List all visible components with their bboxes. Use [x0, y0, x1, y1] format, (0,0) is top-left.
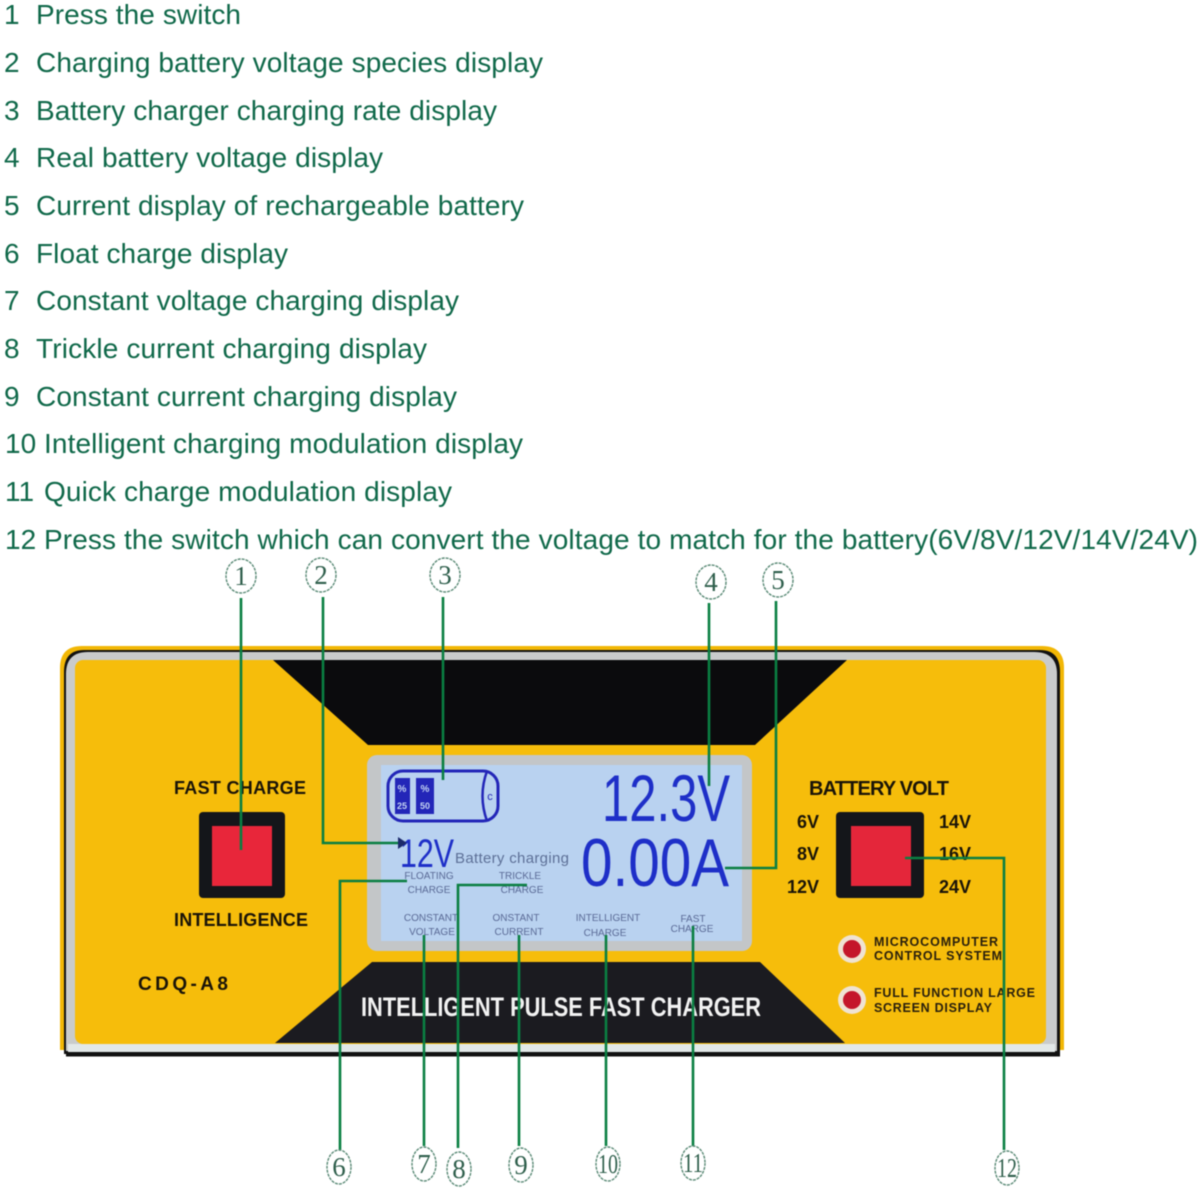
mode labels: CHARGE [584, 928, 627, 939]
mode labels: FLOATING [404, 871, 454, 882]
legend list: 4 [4, 142, 20, 173]
callout numbers: 8 [452, 1154, 466, 1184]
callout numbers: 10 [598, 1149, 618, 1179]
left switch: FAST CHARGE [174, 778, 306, 798]
right switch and voltage labels: 8V [797, 844, 819, 864]
legend list: Battery charger charging rate display [36, 95, 497, 126]
legend list: 6 [4, 238, 20, 269]
callout numbers: 12 [997, 1153, 1017, 1183]
legend list: Trickle current charging display [36, 333, 427, 364]
legend list: 2 [4, 47, 20, 78]
legend list: Quick charge modulation display [44, 476, 452, 507]
callout numbers: 3 [438, 560, 452, 590]
legend list: Real battery voltage display [36, 142, 383, 173]
mode labels: CHARGE [408, 885, 451, 896]
legend list: 11 [5, 476, 34, 507]
right switch and voltage labels: BATTERY VOLT [809, 778, 949, 800]
right switch and voltage labels [787, 778, 971, 898]
legend list: 8 [4, 333, 20, 364]
mode labels: TRICKLE [499, 871, 541, 882]
legend list: 9 [4, 381, 20, 412]
charger front panel [60, 646, 1064, 1056]
callout numbers: 4 [704, 567, 718, 597]
battery icon: c [487, 791, 493, 803]
mode labels: CHARGE [501, 885, 544, 896]
left switch: INTELLIGENCE [174, 910, 308, 930]
indicator lights: FULL FUNCTION LARGE [874, 986, 1035, 1000]
battery icon: 25 [397, 801, 407, 811]
mode labels: ONSTANT [492, 913, 540, 924]
right switch and voltage labels: 12V [787, 877, 819, 897]
callout numbers: 9 [514, 1150, 528, 1180]
mode labels: VOLTAGE [409, 927, 455, 938]
legend list: 3 [4, 95, 20, 126]
status text: Battery charging [455, 850, 569, 867]
callout numbers: 5 [771, 565, 785, 595]
mode labels: INTELLIGENT [576, 913, 640, 924]
battery icon: % [398, 784, 407, 795]
legend list: Float charge display [36, 238, 288, 269]
mode labels: FAST [680, 914, 706, 925]
right switch and voltage labels: 16V [939, 844, 971, 864]
mode labels [404, 871, 714, 939]
left switch [174, 778, 308, 930]
legend list: Charging battery voltage species display [36, 47, 543, 78]
legend list: Constant current charging display [36, 381, 457, 412]
voltage reading: 12.3V [602, 761, 730, 835]
product title: INTELLIGENT PULSE FAST CHARGER [361, 992, 761, 1022]
battery icon: % [421, 784, 430, 795]
indicator lights: CONTROL SYSTEM [874, 949, 1002, 963]
bottom black trapezoid [275, 962, 845, 1043]
indicator lights [838, 935, 1035, 1015]
right switch and voltage labels: 24V [939, 877, 971, 897]
legend list: Intelligent charging modulation display [44, 428, 523, 459]
callout numbers: 6 [332, 1152, 346, 1182]
legend list: 10 [5, 428, 36, 459]
current reading: 0.00A [581, 825, 730, 901]
top black trapezoid [273, 660, 847, 745]
indicator lights: MICROCOMPUTER [874, 935, 998, 949]
mode labels: CONSTANT [404, 913, 458, 924]
model number: CDQ-A8 [138, 974, 228, 995]
callout numbers: 2 [314, 560, 328, 590]
legend list: 7 [4, 285, 20, 316]
callout numbers [226, 558, 1019, 1186]
legend list: Constant voltage charging display [36, 285, 459, 316]
callout numbers: 7 [417, 1149, 431, 1179]
legend list: 12 [5, 524, 36, 555]
battery icon [388, 771, 498, 821]
right switch and voltage labels: 6V [797, 812, 819, 832]
right switch and voltage labels: 14V [939, 812, 971, 832]
legend list: 5 [4, 190, 20, 221]
callout lines [241, 597, 1004, 1150]
mode labels: CHARGE [671, 924, 714, 935]
mode labels: CURRENT [495, 927, 543, 938]
LCD screen [367, 755, 752, 951]
callout numbers: 11 [683, 1148, 703, 1178]
battery icon: 50 [420, 801, 430, 811]
callout numbers: 1 [234, 561, 248, 591]
legend list: Press the switch which can convert the voltage to match for the battery(6V/8V/12V/14V/24V) [44, 524, 1198, 555]
legend list: Current display of rechargeable battery [36, 190, 524, 221]
legend list [4, 0, 1198, 555]
indicator lights: SCREEN DISPLAY [874, 1001, 993, 1015]
battery type reading: 12V [400, 832, 454, 876]
